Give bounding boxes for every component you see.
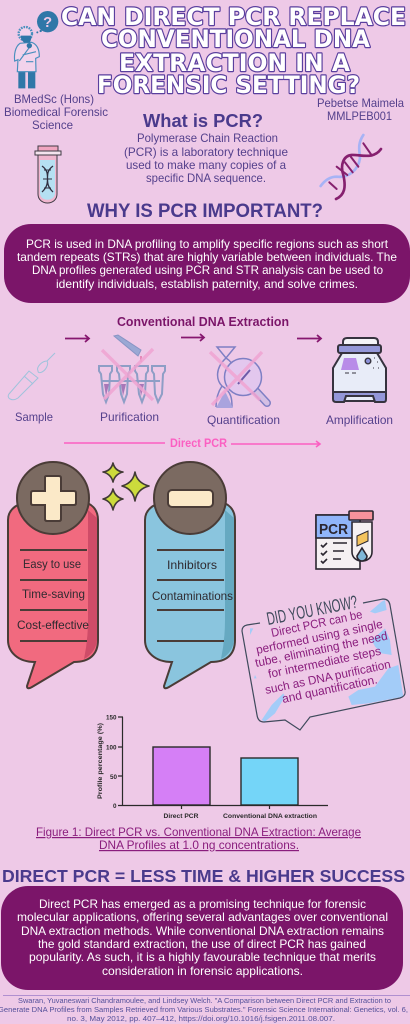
icon: sample swab	[8, 353, 55, 400]
callout: did you know: performed using a single	[255, 617, 384, 657]
icon: purification tubes crossed	[99, 335, 165, 402]
bar chart: 150	[106, 714, 117, 722]
panel: why PCR is important: DNA profiles generated using PCR and STR analysis can be used to	[32, 263, 383, 277]
icon: scientist with question bubble: ?	[43, 15, 52, 31]
heading: why is PCR important: WHY IS PCR IMPORTANT?	[87, 201, 323, 222]
icon: DNA helix	[321, 135, 381, 199]
panel: why PCR is important: identify individuals, establish paternity, and solve crimes.	[56, 277, 358, 291]
text: figure caption	[36, 825, 361, 852]
text: amplification: Amplification	[326, 413, 393, 427]
text: PCR definition: Polymerase Chain Reaction	[137, 131, 278, 145]
text: PCR definition: used to make many copies of a	[126, 158, 286, 172]
arrow: direct PCR	[64, 441, 320, 447]
text: degree: Biomedical Forensic	[4, 105, 108, 119]
panel: direct PCR summary: Direct PCR has emerged as a promising technique for forensic	[39, 897, 366, 911]
panel: why PCR is important: tandem repeats (STRs) that are highly variable between individuals. The	[17, 250, 397, 264]
icon: sparkles	[103, 463, 149, 510]
title: FORENSIC SETTING?	[97, 71, 360, 99]
bar chart: Direct PCR	[164, 813, 199, 820]
callout: did you know: and quantification.	[281, 672, 379, 706]
arrows: conventional workflow	[65, 334, 321, 342]
text: author	[317, 96, 404, 123]
panel: cons bubble: Inhibitors	[167, 558, 217, 572]
text: PCR definition: specific DNA sequence.	[146, 171, 266, 185]
text: author: Pebetse Maimela	[317, 96, 404, 110]
title	[61, 3, 406, 99]
callout: did you know: tube, eliminating the need	[254, 629, 389, 670]
heading: conventional DNA extraction: Conventional DNA Extraction	[117, 315, 289, 329]
panel: why PCR is important: PCR is used in DNA profiling to amplify specific regions such as short	[26, 237, 389, 251]
panel: why PCR is important	[4, 224, 410, 303]
panel: pros bubble: Time-saving	[22, 587, 85, 601]
bar chart: Profile percentage (%)	[97, 723, 104, 799]
panel: direct PCR summary: molecular applications, offering several advantages over conventional	[17, 910, 388, 924]
text: figure caption: Figure 1: Direct PCR vs. Conventional DNA Extraction: Average	[36, 825, 361, 839]
icon: test tube	[35, 146, 61, 203]
panel: direct PCR summary: DNA extraction methods. While conventional DNA extraction remains	[21, 924, 384, 938]
text: PCR definition: (PCR) is a laboratory technique	[124, 145, 288, 159]
heading: what is PCR: What is PCR?	[143, 110, 263, 131]
text: quantification: Quantification	[207, 413, 280, 427]
text: degree: BMedSc (Hons)	[14, 92, 94, 106]
text: reference: Generate DNA Profiles from Samples Retrieved from Various Substrates." Forensic Science International: Genetics, vol. 6,	[0, 1005, 408, 1014]
text: degree	[4, 92, 108, 132]
panel: direct PCR summary: consideration in forensic applications.	[102, 964, 303, 978]
callout: did you know: DID YOU KNOW?	[265, 592, 359, 629]
panel: direct PCR summary: the gold standard extraction, the use of direct PCR has gained	[38, 937, 366, 951]
icon: scientist with question bubble	[14, 11, 58, 88]
text: purification: Purification	[100, 410, 159, 424]
text: author: MMLPEB001	[327, 109, 392, 123]
title: CAN DIRECT PCR REPLACE	[61, 3, 406, 31]
bar chart: 100	[106, 744, 117, 752]
bar chart	[97, 714, 328, 820]
text: PCR definition	[124, 131, 288, 185]
title: CONVENTIONAL DNA	[101, 25, 370, 53]
text: direct PCR: Direct PCR	[170, 438, 228, 450]
bar chart: 0	[113, 803, 117, 810]
panel: pros bubble	[8, 462, 98, 688]
text: figure caption: DNA Profiles at 1.0 ng concentrations.	[99, 838, 299, 852]
icon: PCR checklist	[316, 511, 373, 569]
panel: direct PCR summary: popularity. As such, it is a highly favourable technique that merits	[29, 950, 376, 964]
panel: direct PCR summary	[1, 886, 403, 990]
bar chart: 50	[110, 774, 118, 781]
icon: PCR checklist: PCR	[319, 521, 348, 538]
icon: quantification crossed	[210, 347, 267, 408]
text: reference: no. 3, May 2012, pp. 407–412, https://doi.org/10.1016/j.fsigen.2011.08.007.	[67, 1014, 335, 1023]
callout: did you know: Direct PCR can be	[270, 607, 364, 640]
text: sample: Sample	[15, 410, 53, 424]
text: reference	[0, 996, 408, 1023]
callout: did you know: such as DNA purification	[264, 657, 392, 697]
callout: did you know	[242, 592, 405, 730]
text: reference: Swaran, Yuvaneswari Chandramoulee, and Lindsey Welch. "A Comparison between Direct PCR and Extraction to	[18, 996, 391, 1005]
bar chart: Conventional DNA extraction	[223, 813, 317, 820]
panel: cons bubble: Contaminations	[152, 589, 233, 603]
panel: cons bubble	[145, 462, 235, 688]
callout: did you know: for intermediate steps	[267, 644, 382, 681]
title: EXTRACTION IN A	[119, 49, 350, 77]
heading: direct PCR less time: DIRECT PCR = LESS TIME & HIGHER SUCCESS	[2, 866, 405, 886]
panel: pros bubble: Cost-effective	[17, 618, 89, 632]
icon: thermocycler	[333, 338, 386, 402]
text: degree: Science	[32, 118, 73, 132]
panel: pros bubble: Easy to use	[23, 557, 81, 571]
